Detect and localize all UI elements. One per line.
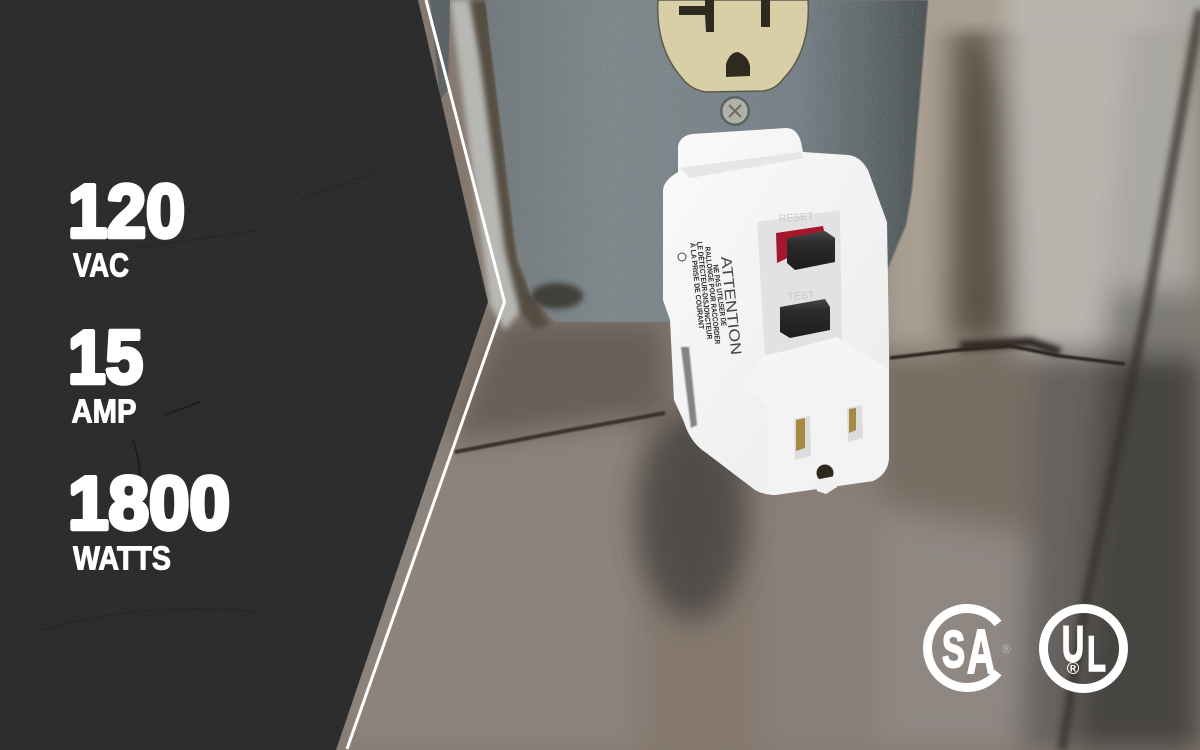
diagonal dark seam — [1062, 10, 1200, 750]
CSA certification logo — [928, 608, 1011, 688]
metal electrical box — [470, 0, 928, 329]
warning text — [688, 241, 729, 345]
spec: 1800 WATTS: WATTS — [73, 540, 171, 576]
attention label: ATTENTION — [717, 256, 744, 356]
spec: 15 AMP: AMP — [72, 392, 136, 430]
UL certification logo — [1044, 608, 1124, 688]
GFCI adapter — [663, 128, 889, 495]
spec: 120 VAC: 120 — [68, 169, 185, 253]
UL certification logo: U — [1062, 616, 1084, 672]
dark panel — [0, 0, 488, 750]
CSA certification logo: ® — [1002, 642, 1011, 656]
csa mini mark — [678, 253, 686, 261]
outlet slot right — [847, 405, 863, 442]
cast shadow under adapter — [637, 410, 747, 620]
UL certification logo: L — [1087, 626, 1106, 682]
ground hole — [815, 464, 837, 494]
warning text: RALLONGE POUR RACCORDER — [703, 246, 722, 345]
test label: TEST — [787, 289, 816, 303]
outlet screw — [720, 96, 750, 126]
upper wall patches — [880, 0, 960, 350]
reset label: RESET — [778, 211, 815, 225]
beige wall outlet — [658, 0, 808, 92]
warning text: NE PAS UTILISER DE — [711, 264, 729, 327]
spec: 15 AMP: 15 — [68, 315, 143, 399]
plug top facet — [743, 337, 888, 405]
UL certification logo: ® — [1067, 659, 1080, 678]
warning text: À LA PRISE DE COURANT — [688, 242, 706, 330]
adapter body — [663, 128, 889, 495]
spec: 1800 WATTS: 1800 — [68, 461, 230, 545]
reset button — [787, 231, 835, 270]
spec: 120 VAC — [68, 169, 185, 284]
button recess — [757, 210, 842, 355]
spec: 15 AMP — [68, 315, 143, 430]
test button — [780, 299, 830, 338]
warning text: LE DÉTECTEUR-DISJONCTEUR — [695, 241, 714, 340]
chevron white divider line — [347, 0, 504, 749]
metal strip beside box — [430, 0, 530, 330]
CSA certification logo: S — [942, 621, 965, 679]
photo background: blurred wall — [330, 0, 1200, 750]
caution block — [681, 347, 697, 428]
plug face — [767, 370, 889, 495]
outlet slot left — [794, 416, 811, 460]
adapter top ridge — [680, 152, 804, 178]
spec: 120 VAC: VAC — [73, 246, 129, 284]
reset button red base — [776, 226, 826, 263]
CSA certification logo: A — [967, 618, 995, 687]
lower wall patches — [880, 350, 1065, 530]
